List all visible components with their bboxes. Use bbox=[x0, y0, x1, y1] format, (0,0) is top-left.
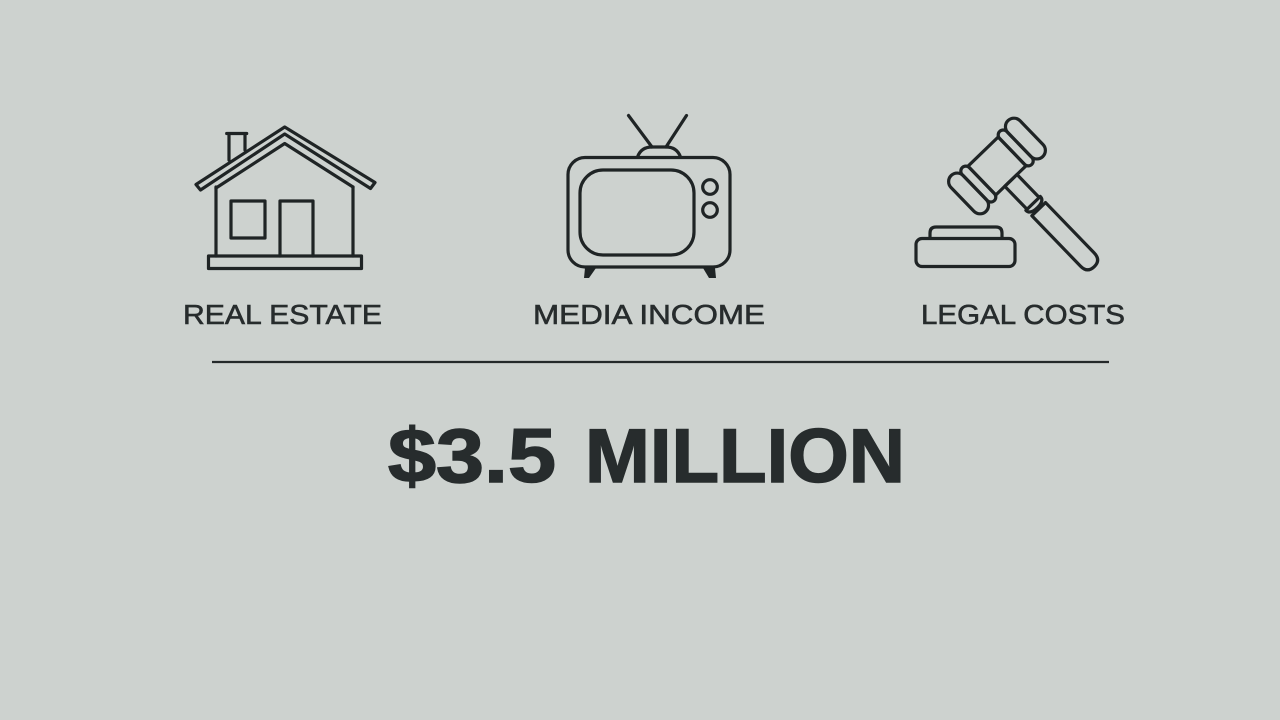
panel: media income bbox=[533, 116, 765, 330]
icon: gavel bbox=[916, 115, 1129, 300]
icon: television bbox=[568, 116, 730, 278]
headline figure: MILLION bbox=[585, 414, 905, 499]
panel: legal costs bbox=[916, 115, 1129, 330]
label: real estate: REAL ESTATE bbox=[183, 299, 382, 330]
label: legal costs: LEGAL COSTS bbox=[921, 299, 1125, 330]
headline figure: $3.5 bbox=[388, 414, 556, 499]
label: media income: MEDIA INCOME bbox=[533, 299, 765, 330]
panel: real estate bbox=[183, 127, 382, 330]
icon: house bbox=[196, 127, 375, 268]
